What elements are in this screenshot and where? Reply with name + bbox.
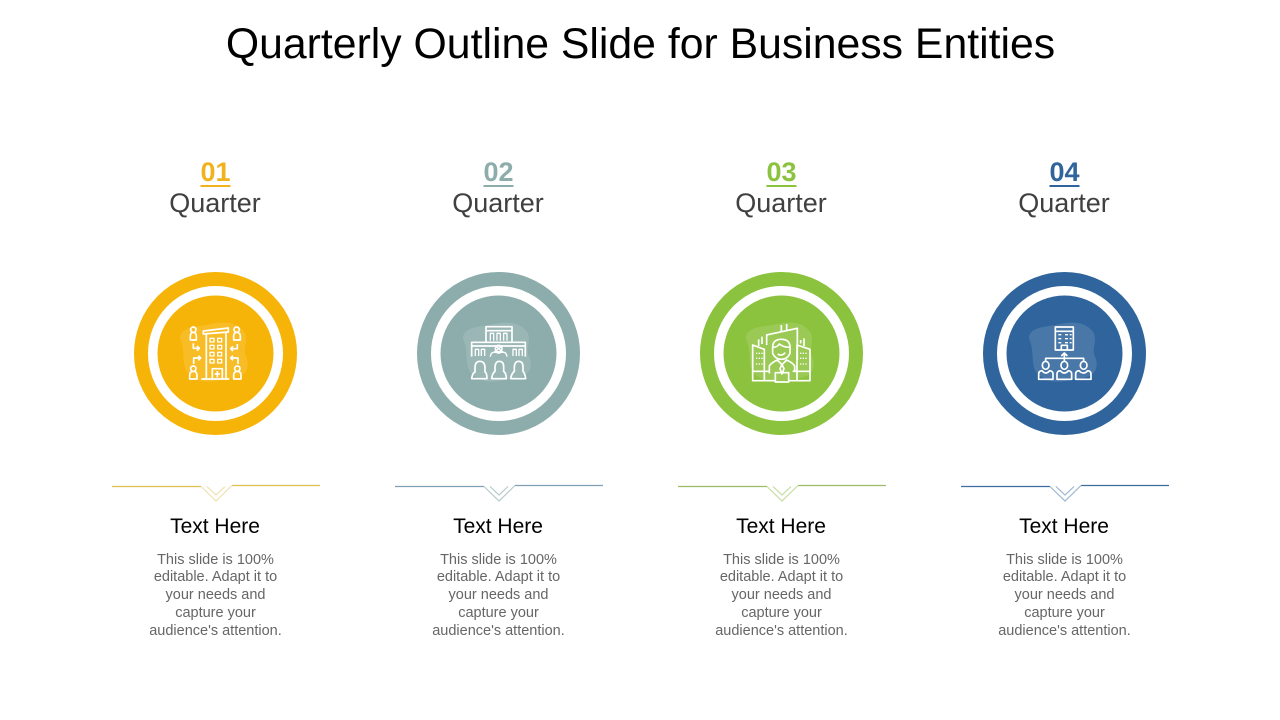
body text: This slide is 100% xyxy=(723,552,840,568)
body text: This slide is 100% xyxy=(1006,552,1123,568)
label: Quarter: Quarter xyxy=(169,188,261,218)
divider: quarter 4 xyxy=(961,486,1169,501)
body text: editable. Adapt it to xyxy=(720,569,843,585)
body text: This slide is 100% xyxy=(440,552,557,568)
body text: audience's attention. xyxy=(432,622,565,638)
icon: businessman in front of city buildings xyxy=(746,323,814,382)
heading: Text Here: Text Here xyxy=(453,515,543,538)
label: Quarter: Quarter xyxy=(452,188,544,218)
circle badge: quarter 2 xyxy=(424,279,573,428)
heading: Text Here: Text Here xyxy=(170,515,260,538)
heading: Text Here: Text Here xyxy=(736,515,826,538)
icon: building above organisation chart of people xyxy=(1029,323,1097,382)
label: Quarter: Quarter xyxy=(735,188,827,218)
circle badge: quarter 1 xyxy=(141,279,290,428)
number 02: 02 xyxy=(483,157,514,187)
column text: quarter 2 xyxy=(432,157,565,638)
body text: audience's attention. xyxy=(715,622,848,638)
body text xyxy=(998,552,1131,638)
number 03: 03 xyxy=(766,157,797,187)
body text xyxy=(432,552,565,638)
body text: audience's attention. xyxy=(998,622,1131,638)
body text: your needs and xyxy=(166,587,265,603)
body text: capture your xyxy=(175,605,256,621)
body text: editable. Adapt it to xyxy=(1003,569,1126,585)
icon: building with three people xyxy=(463,323,531,382)
body text: editable. Adapt it to xyxy=(437,569,560,585)
body text xyxy=(149,552,282,638)
body text: audience's attention. xyxy=(149,622,282,638)
icon: office building with people and arrows xyxy=(180,323,248,382)
column text: quarter 3 xyxy=(715,157,848,638)
heading: Text Here: Text Here xyxy=(1019,515,1109,538)
number 01: 01 xyxy=(200,157,231,187)
divider: quarter 1 xyxy=(112,486,320,501)
body text: your needs and xyxy=(449,587,548,603)
circle badge: quarter 4 xyxy=(990,279,1139,428)
body text: capture your xyxy=(741,605,822,621)
body text xyxy=(715,552,848,638)
number 04: 04 xyxy=(1049,157,1080,187)
divider: quarter 2 xyxy=(395,486,603,501)
circle badge: quarter 3 xyxy=(707,279,856,428)
body text: capture your xyxy=(1024,605,1105,621)
label: Quarter: Quarter xyxy=(1018,188,1110,218)
body text: your needs and xyxy=(732,587,831,603)
column text: quarter 4 xyxy=(998,157,1131,638)
title: Quarterly Outline Slide for Business Entities xyxy=(226,20,1055,68)
divider: quarter 3 xyxy=(678,486,886,501)
column text: quarter 1 xyxy=(149,157,282,638)
body text: your needs and xyxy=(1015,587,1114,603)
body text: capture your xyxy=(458,605,539,621)
body text: This slide is 100% xyxy=(157,552,274,568)
body text: editable. Adapt it to xyxy=(154,569,277,585)
